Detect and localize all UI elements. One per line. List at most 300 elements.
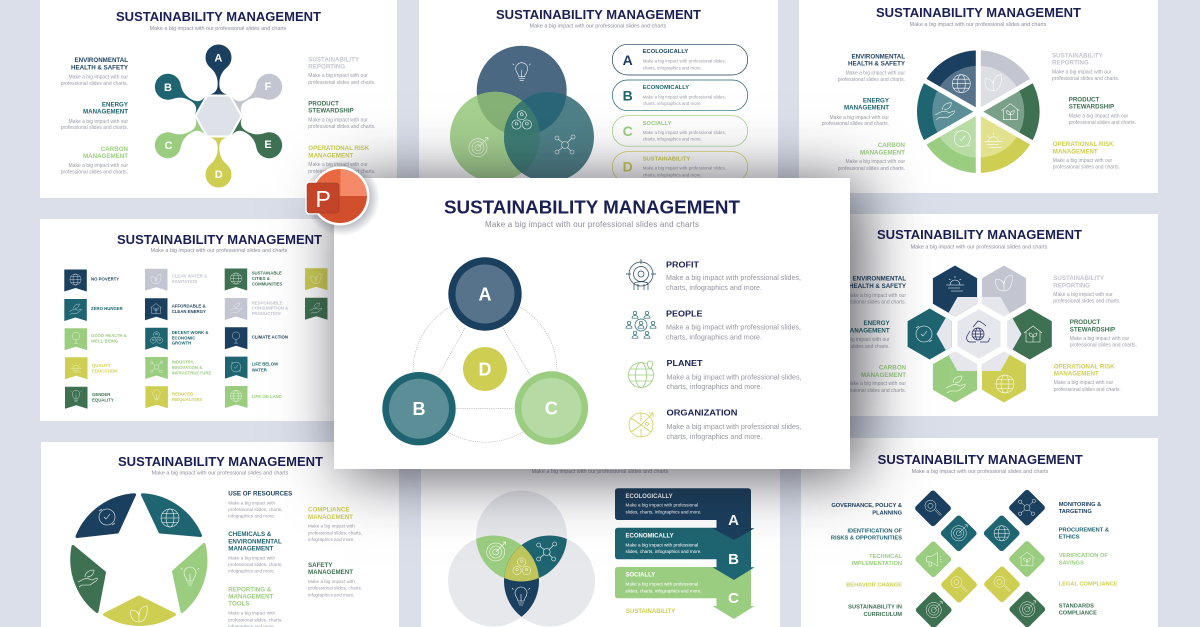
label: chemicals & environmental management: CHEMICALS & (228, 531, 272, 538)
label: operational risk management: professional slides and charts. (1053, 164, 1120, 170)
subtitle: Make a big impact with our professional slides and charts (532, 469, 669, 475)
icon: recycling globe (161, 509, 179, 527)
label: operational risk management (308, 145, 376, 175)
label: carbon management: MANAGEMENT (860, 149, 905, 156)
heading: SUSTAINABILITY MANAGEMENT (878, 452, 1083, 467)
label: energy management: professional slides and charts. (822, 344, 890, 350)
left labels: CURRICULUM (863, 612, 902, 618)
organization text: Make a big impact with professional slides, (666, 422, 802, 431)
label: environmental health & safety (839, 276, 907, 306)
right labels: VERIFICATION OF (1059, 553, 1108, 559)
label: energy management: ENERGY (102, 101, 129, 108)
icon: hand (78, 570, 97, 587)
label: product stewardship: Make a big impact with our (308, 118, 368, 124)
node D (463, 347, 507, 391)
goal labels column 3: RESPONSIBLE (252, 300, 283, 305)
label: carbon management: professional slides and charts. (838, 166, 905, 172)
pill D: charts, infographics and more. (643, 173, 702, 178)
goal labels column 3: WATER (252, 367, 268, 372)
label: environmental health & safety: professional slides and charts. (839, 300, 906, 306)
label: sustainability reporting (1053, 275, 1121, 304)
label: product stewardship: PRODUCT (1070, 319, 1101, 326)
label: operational risk management: MANAGEMENT (1054, 371, 1099, 378)
label: operational risk management (1053, 141, 1120, 170)
pill B: B (623, 88, 633, 104)
hub diagram with six petals: D (215, 169, 223, 181)
icon: organization compass (629, 413, 653, 437)
label: reporting & management tools (228, 586, 282, 627)
goal labels column 1: GOOD HEALTH & (91, 333, 127, 338)
left labels: BEHAVIOR CHANGE (846, 583, 902, 589)
pill A: charts, infographics and more. (643, 65, 702, 70)
panel: diamond grid slide (801, 438, 1158, 627)
label: sustainability reporting: Make a big impact with our (308, 73, 368, 79)
node C (515, 371, 588, 445)
label: carbon management: CARBON (879, 364, 907, 371)
label: operational risk management: OPERATIONAL RISK (1054, 363, 1115, 370)
label: energy management (822, 97, 890, 127)
label: sustainability reporting: REPORTING (308, 63, 345, 70)
panel: main slide (334, 178, 850, 469)
label: product stewardship: Make a big impact with our (1069, 114, 1129, 120)
icon: sun (946, 276, 964, 291)
label: product stewardship: professional slides and charts. (1069, 120, 1136, 126)
label: energy management (61, 101, 129, 131)
label: environmental health & safety: ENVIRONMENTAL (852, 276, 906, 283)
left labels: PLANNING (872, 510, 903, 516)
label: sustainability reporting: REPORTING (1053, 282, 1090, 289)
planet text: Make a big impact with professional slides, (666, 372, 802, 381)
label: product stewardship: PRODUCT (1069, 96, 1100, 103)
icon: leaf (985, 75, 1002, 91)
label: carbon management: Make a big impact with our (847, 381, 906, 387)
label: sustainability reporting (308, 56, 376, 86)
diamond icons (914, 489, 1046, 627)
label: sustainability reporting: Make a big impact with our (1053, 292, 1113, 298)
right labels: STANDARDS (1059, 604, 1094, 610)
label: operational risk management: OPERATIONAL RISK (308, 145, 370, 152)
subtitle: Make a big impact with our professional slides and charts (485, 220, 699, 229)
icon: PowerPoint logo: P (316, 186, 331, 212)
icon: bulb (512, 587, 530, 605)
goal labels column 2: INDUSTRY, (172, 360, 194, 365)
node B (382, 372, 456, 445)
pill A: Make a big impact with professional slides, (643, 59, 726, 64)
label: compliance management: professional slides, charts, (308, 530, 362, 535)
label: safety management: MANAGEMENT (308, 569, 353, 576)
goal labels column 2: AFFORDABLE & (172, 303, 206, 308)
label: carbon management: CARBON (101, 146, 129, 153)
goal flags (64, 268, 328, 409)
label: product stewardship: PRODUCT (308, 100, 339, 107)
heading: SUSTAINABILITY MANAGEMENT (877, 227, 1082, 242)
ribbon B: ECONOMICALLY (626, 533, 674, 539)
organization text: ORGANIZATION (666, 408, 738, 418)
icon: check circle (916, 326, 932, 342)
planet text: PLANET (666, 358, 703, 368)
pill D (612, 152, 748, 182)
label: product stewardship: professional slides and charts. (308, 124, 376, 130)
right labels: COMPLIANCE (1059, 611, 1097, 617)
panel: venn with arrow ribbons slide (421, 460, 780, 627)
label: chemicals & environmental management (228, 531, 282, 574)
right labels: LEGAL COMPLIANCE (1059, 581, 1118, 587)
ribbon B: slides, charts, infographics and more. (626, 549, 702, 554)
label: energy management: ENERGY (863, 97, 890, 104)
icon: globe (952, 75, 970, 93)
ribbon A: slides, charts, infographics and more. (626, 510, 702, 515)
label: product stewardship: STEWARDSHIP (1070, 326, 1115, 333)
pill C: charts, infographics and more. (643, 137, 702, 142)
honeycomb diagram (908, 266, 1052, 402)
pill C: C (623, 123, 633, 139)
label: use of resources (228, 490, 292, 519)
icon: network (537, 542, 557, 561)
label: carbon management: professional slides and charts. (61, 170, 128, 176)
people text (666, 308, 801, 341)
label: reporting & management tools: professional slides, charts, (228, 617, 282, 622)
label: environmental health & safety: professional slides and charts. (61, 81, 128, 87)
icon: globe (996, 375, 1014, 393)
profit text (666, 259, 801, 292)
label: sustainability reporting (1052, 52, 1119, 82)
organization text (666, 408, 802, 441)
subtitle: Make a big impact with our professional slides and charts (150, 26, 287, 32)
people text: charts, infographics and more. (666, 332, 762, 341)
goal labels column 3: CITIES & (252, 276, 270, 281)
label: sustainability reporting: SUSTAINABILITY (1053, 275, 1105, 282)
label: carbon management (839, 364, 907, 394)
pill B (612, 80, 748, 111)
goal labels column 2: CLEAN WATER & (172, 274, 207, 279)
label: environmental health & safety: Make a big impact with our (69, 74, 128, 80)
label: product stewardship: professional slides and charts. (1070, 342, 1137, 348)
label: energy management: MANAGEMENT (845, 327, 890, 334)
profit text: PROFIT (666, 259, 700, 269)
label: compliance management: Make a big impact with (308, 524, 355, 529)
icon: people network (626, 311, 656, 338)
panel: six segment pie slide (799, 0, 1158, 193)
subtitle: Make a big impact with our professional slides and charts (152, 470, 289, 476)
pie diagram (899, 35, 1058, 188)
label: product stewardship (1069, 96, 1136, 126)
goal labels column 1: EQUALITY (92, 398, 114, 403)
heading: SUSTAINABILITY MANAGEMENT (116, 9, 321, 24)
label: use of resources: Make a big impact with (228, 500, 275, 505)
dashed connectors (413, 307, 557, 442)
goal labels column 2: INNOVATION & (172, 365, 202, 370)
hub diagram with six petals: F (265, 81, 272, 93)
goal labels column 1: QUALITY (92, 363, 111, 368)
pill B: ECONOMICALLY (643, 85, 689, 91)
label: chemicals & environmental management: Make a big impact with (228, 555, 275, 560)
icon: check circle (954, 131, 970, 147)
icon: planet globe and pin (628, 361, 654, 388)
icon: check circle (99, 509, 115, 525)
ribbon B (615, 528, 754, 580)
left labels: GOVERNANCE, POLICY & (831, 503, 902, 509)
label: sustainability reporting: professional slides and charts. (308, 80, 376, 86)
label: energy management: Make a big impact with our (830, 115, 889, 121)
icon: profit target person (626, 259, 656, 290)
star diagram (72, 495, 206, 624)
hub diagram with six petals: A (214, 52, 222, 64)
pill A (612, 44, 748, 75)
left labels: TECHNICAL (869, 554, 903, 560)
goal labels column 2: REDUCED (172, 392, 193, 397)
goal labels column 2: SANITATION (172, 279, 197, 284)
panel: five piece star slide (41, 442, 399, 627)
people text: Make a big impact with professional slides, (666, 322, 801, 332)
label: environmental health & safety (61, 57, 129, 87)
pill A: A (623, 52, 633, 68)
ribbon C: SOCIALLY (626, 573, 655, 579)
ribbon C: C (728, 590, 739, 607)
goal labels column 2: DECENT WORK & (172, 330, 208, 335)
icon: target (469, 138, 488, 157)
label: carbon management: Make a big impact with our (846, 159, 905, 165)
hub diagram with six petals: C (165, 140, 173, 152)
label: compliance management: COMPLIANCE (308, 507, 350, 514)
label: sustainability reporting: professional slides and charts. (1053, 298, 1121, 304)
ribbon C: Make a big impact with professional (626, 582, 698, 587)
label: safety management: SAFETY (308, 562, 333, 569)
label: carbon management: professional slides and charts. (839, 388, 906, 394)
label: product stewardship (1070, 319, 1137, 348)
goal labels column 2: CLEAN ENERGY (172, 309, 206, 314)
heading: SUSTAINABILITY MANAGEMENT (444, 196, 741, 218)
right labels: SAVINGS (1059, 560, 1084, 566)
label: environmental health & safety: ENVIRONMENTAL (851, 53, 905, 60)
subtitle: Make a big impact with our professional slides and charts (910, 22, 1047, 28)
panel: hub and petals slide (40, 0, 397, 198)
goal labels column 1: ZERO HUNGER (91, 306, 124, 311)
label: operational risk management: Make a big impact with our (1053, 158, 1113, 164)
label: operational risk management: professional slides and charts. (308, 169, 376, 175)
label: environmental health & safety: Make a big impact with our (847, 293, 906, 299)
label: sustainability reporting: SUSTAINABILITY (308, 56, 360, 63)
profit text: Make a big impact with professional slides, (666, 273, 801, 282)
right labels: MONITORING & (1059, 502, 1101, 508)
subtitle: Make a big impact with our professional slides and charts (151, 248, 288, 254)
goal labels column 3: LIFE BELOW (252, 362, 279, 367)
goal labels column 3: LIFE ON LAND (252, 394, 282, 399)
hub diagram with six petals: E (264, 139, 272, 151)
left labels: SUSTAINABILITY IN (848, 605, 902, 611)
ribbon B: Make a big impact with professional (626, 542, 698, 547)
label: safety management (308, 562, 362, 597)
label: energy management: professional slides and charts. (61, 125, 128, 131)
label: safety management: professional slides, charts, (308, 586, 362, 591)
label: product stewardship (308, 100, 376, 130)
subtitle: Make a big impact with our professional slides and charts (530, 24, 667, 30)
organization text: charts, infographics and more. (666, 432, 762, 441)
pill D: SUSTAINABILITY (643, 156, 690, 162)
pill C: SOCIALLY (643, 121, 672, 127)
label: environmental health & safety: HEALTH & SAFETY (848, 61, 906, 68)
label: use of resources: infographics and more. (228, 514, 275, 519)
label: chemicals & environmental management: ENVIRONMENTAL (228, 538, 282, 545)
goal labels column 1: NO POVERTY (91, 276, 119, 282)
right labels (1059, 502, 1118, 617)
label: environmental health & safety: ENVIRONMENTAL (74, 57, 128, 64)
label: energy management: Make a big impact with our (830, 337, 890, 343)
label: safety management: Make a big impact with (308, 579, 355, 584)
label: use of resources: USE OF RESOURCES (228, 490, 292, 497)
label: operational risk management: Make a big impact with our (308, 162, 368, 168)
ribbon A: ECOLOGICALLY (626, 494, 673, 500)
label: operational risk management: MANAGEMENT (1053, 148, 1098, 155)
label: operational risk management (1054, 363, 1121, 393)
goal labels column 3: CLIMATE ACTION (252, 335, 288, 340)
label: chemicals & environmental management: MANAGEMENT (228, 545, 274, 552)
left labels (831, 503, 903, 618)
label: sustainability reporting: Make a big impact with our (1052, 70, 1112, 76)
label: product stewardship: STEWARDSHIP (1069, 104, 1114, 111)
goal labels column 3: SUSTAINABLE (252, 271, 282, 276)
goal labels column 2: ECONOMIC (172, 335, 195, 340)
ribbon C (615, 567, 754, 619)
subtitle: Make a big impact with our professional slides and charts (912, 469, 1049, 475)
label: energy management: Make a big impact with our (69, 119, 128, 125)
icon: house (1024, 326, 1042, 342)
goal labels column 2 (172, 274, 211, 402)
left labels: IMPLEMENTATION (852, 561, 902, 567)
icon: leaf (996, 275, 1012, 291)
goal labels column 1: WELL-BEING (91, 339, 119, 344)
icon: target (487, 542, 506, 561)
left labels: RISKS & OPPORTUNITIES (831, 535, 902, 541)
right labels: PROCUREMENT & (1059, 527, 1109, 533)
icon: PowerPoint logo (304, 160, 380, 236)
label: sustainability reporting: professional slides and charts. (1052, 76, 1119, 82)
ribbon A: Make a big impact with professional (626, 503, 698, 508)
icon: people trio (512, 111, 532, 129)
pill A: ECOLOGICALLY (643, 49, 688, 55)
ribbon A (615, 488, 754, 540)
pill B: Make a big impact with professional slides, (643, 94, 726, 99)
label: carbon management: Make a big impact with our (69, 163, 128, 169)
label: environmental health & safety: HEALTH & SAFETY (849, 283, 907, 290)
profit text: charts, infographics and more. (666, 283, 762, 292)
heading: SUSTAINABILITY MANAGEMENT (118, 454, 323, 469)
label: energy management: MANAGEMENT (844, 105, 889, 112)
label: energy management: MANAGEMENT (83, 109, 128, 116)
label: reporting & management tools: REPORTING & (228, 586, 272, 593)
label: carbon management: MANAGEMENT (83, 153, 128, 160)
label: operational risk management: Make a big impact with our (1054, 380, 1114, 386)
label: use of resources: professional slides, charts, (228, 507, 282, 512)
right labels: TARGETING (1059, 509, 1092, 515)
label: environmental health & safety (838, 53, 906, 83)
icon: network (555, 135, 575, 154)
heading: SUSTAINABILITY MANAGEMENT (876, 5, 1081, 20)
icon: hand (946, 376, 965, 393)
panel: honeycomb hexagon slide (822, 214, 1158, 416)
planet text (666, 358, 802, 391)
label: environmental health & safety: HEALTH & SAFETY (71, 65, 129, 72)
pill D: D (623, 158, 633, 174)
label: energy management: ENERGY (864, 320, 891, 327)
panel: venn with pill list slide (419, 0, 778, 185)
left labels: IDENTIFICATION OF (847, 528, 903, 534)
label: carbon management (61, 146, 129, 176)
icon: hand (935, 103, 955, 120)
label: environmental health & safety: Make a big impact with our (846, 70, 905, 76)
goal labels column 1: GENDER (92, 392, 111, 397)
label: carbon management: CARBON (878, 142, 906, 149)
venn diagram (450, 46, 594, 182)
icon: bulb (181, 567, 199, 585)
label: environmental health & safety: professional slides and charts. (838, 77, 905, 83)
icon: leaf (131, 606, 147, 622)
goal labels column 2: INFRASTRUCTURE (172, 370, 211, 375)
people text: PEOPLE (666, 308, 703, 318)
venn diagram (448, 490, 595, 626)
label: safety management: infographics and more. (308, 592, 355, 597)
goal labels column 3: COMMUNITIES (252, 281, 282, 286)
label: product stewardship: Make a big impact with our (1070, 336, 1130, 342)
pill C: Make a big impact with professional slides, (643, 130, 726, 135)
ribbon B: B (728, 551, 739, 568)
node A (448, 257, 522, 331)
label: operational risk management: MANAGEMENT (308, 152, 354, 159)
ribbon C: slides, charts, infographics and more. (626, 588, 702, 593)
planet text: charts, infographics and more. (666, 382, 762, 391)
heading: SUSTAINABILITY MANAGEMENT (496, 7, 701, 22)
label: reporting & management tools: Make a big impact with (228, 611, 275, 616)
label: compliance management: MANAGEMENT (308, 514, 353, 521)
node D: D (478, 360, 492, 380)
ribbon A: A (728, 512, 739, 529)
label: carbon management: MANAGEMENT (861, 372, 906, 379)
node A: A (478, 284, 492, 304)
goal labels column 3: PRODUCTION (252, 311, 281, 316)
panel: sustainable development goals slide (40, 219, 340, 421)
label: chemicals & environmental management: professional slides, charts, (228, 562, 282, 567)
label: carbon management (838, 142, 906, 172)
subtitle: Make a big impact with our professional slides and charts (911, 244, 1048, 250)
label: compliance management (308, 507, 362, 542)
goal labels column 3: CONSUMPTION & (252, 306, 288, 311)
label: compliance management: infographics and more. (308, 537, 355, 542)
label: reporting & management tools: TOOLS (228, 601, 250, 608)
label: operational risk management: OPERATIONAL RISK (1053, 141, 1114, 148)
icon: recycling globe (967, 321, 990, 342)
label: operational risk management: professional slides and charts. (1054, 387, 1121, 393)
heading: SUSTAINABILITY MANAGEMENT (117, 232, 322, 247)
goal labels column 2: GROWTH (172, 341, 191, 346)
node C: C (545, 398, 558, 418)
label: sustainability reporting: SUSTAINABILITY (1052, 52, 1104, 59)
hub diagram with six petals (150, 45, 287, 187)
right labels: ETHICS (1059, 535, 1080, 541)
pill C (612, 116, 748, 146)
label: product stewardship: STEWARDSHIP (308, 108, 354, 115)
goal labels column 3 (252, 271, 288, 399)
label: sustainability: SUSTAINABILITY (626, 609, 675, 615)
goal labels column 1 (91, 276, 127, 403)
goal labels column 2: INEQUALITIES (172, 397, 202, 402)
icon: house (1001, 104, 1019, 120)
label: energy management: professional slides and charts. (822, 121, 889, 127)
hub diagram with six petals: B (164, 82, 172, 94)
label: sustainability reporting: REPORTING (1052, 60, 1089, 67)
center card shadow (334, 178, 850, 469)
label: chemicals & environmental management: infographics and more. (228, 569, 275, 574)
pill B: charts, infographics and more. (643, 101, 702, 106)
icon: sun (984, 133, 1002, 148)
